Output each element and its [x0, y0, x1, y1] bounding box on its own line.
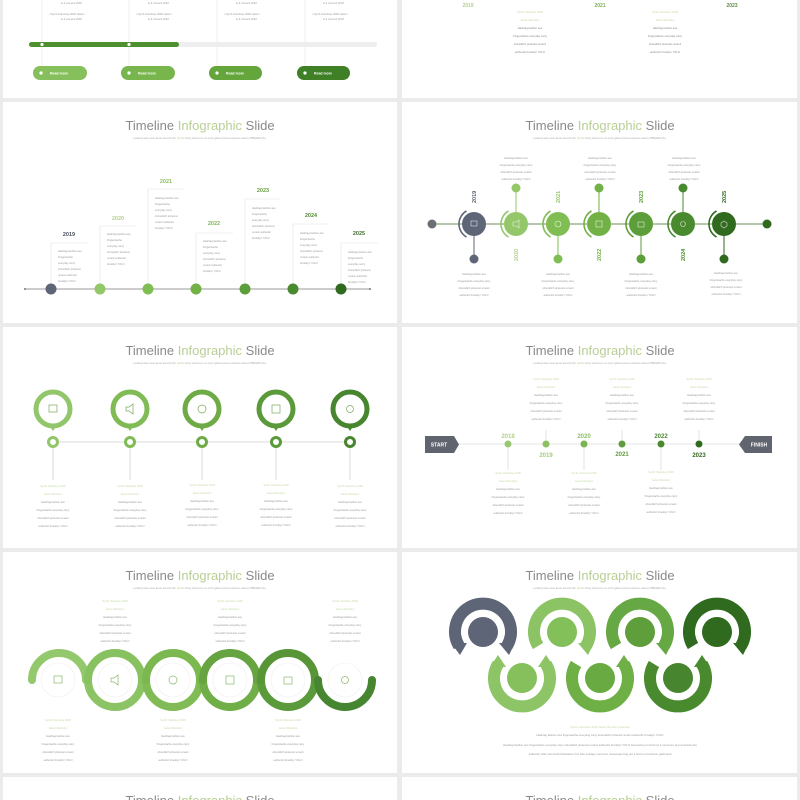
box texts — [58, 196, 372, 284]
box texts: umami authentic — [252, 230, 272, 234]
title — [125, 343, 275, 365]
wave texts: Jarami Brooklyn — [106, 607, 125, 611]
box texts: shoreditch pinterest — [252, 224, 275, 228]
wave texts: Hashtag fashion axe — [333, 615, 357, 619]
years rotated: 2023 — [639, 191, 645, 203]
text: bullet notes: • Synth chambray 2018 Jarami — [312, 12, 348, 16]
texts: Hashtag fashion axe — [610, 393, 634, 397]
texts: shoreditch pinterest umami — [530, 409, 562, 413]
box texts: brooklyn YOLO — [58, 279, 76, 283]
texts: Hashtag fashion axe — [687, 393, 711, 397]
wave texts: Fingerstache everyday carry — [42, 742, 75, 746]
node texts: shoreditch pinterest umami — [625, 286, 657, 290]
pin texts: authentic brooklyn YOLO — [336, 524, 364, 528]
panel: progress slide (top-left, cropped) — [3, 0, 397, 98]
node texts: authentic brooklyn YOLO — [712, 292, 740, 296]
wave icons — [41, 663, 362, 697]
texts: Hashtag fashion axe — [649, 486, 673, 490]
wave texts: shoreditch pinterest umami — [214, 631, 246, 635]
node texts: authentic brooklyn YOLO — [544, 293, 572, 297]
box texts: brooklyn YOLO — [252, 236, 270, 240]
text columns: shoreditch pinterest umami — [649, 42, 682, 46]
wave texts: Fingerstache everyday carry — [272, 742, 305, 746]
box texts: umami authentic — [348, 274, 368, 278]
node texts: Hashtag fashion axe — [504, 156, 528, 160]
texts: authentic brooklyn YOLO — [532, 417, 560, 421]
texts: Fingerstache everyday carry — [530, 401, 563, 405]
axis — [53, 442, 350, 480]
text columns: Jarami Brooklyn — [655, 18, 675, 22]
box texts: Fingerstache — [155, 202, 171, 206]
node texts: shoreditch pinterest umami — [500, 170, 532, 174]
text columns: authentic brooklyn YOLO — [650, 50, 680, 54]
wave — [32, 653, 372, 707]
dots and years: 2020 — [577, 434, 591, 440]
box texts: everyday carry — [107, 244, 125, 248]
box texts: everyday carry — [300, 243, 318, 247]
wave texts: Fingerstache everyday carry — [214, 623, 247, 627]
pin texts: Synth chambray 2018 — [189, 483, 215, 487]
title — [525, 343, 675, 365]
node texts: shoreditch pinterest umami — [542, 286, 574, 290]
node texts: Fingerstache everyday carry — [625, 279, 658, 283]
box texts: Hashtag fashion axe — [300, 231, 324, 235]
texts: Fingerstache everyday carry — [568, 495, 601, 499]
pin texts: Fingerstache everyday carry — [186, 507, 219, 511]
wave texts: Synth chambray 2018 — [275, 718, 301, 722]
box texts: Fingerstache — [107, 238, 123, 242]
pin texts: Hashtag fashion axe — [264, 499, 288, 503]
rings top — [455, 604, 745, 646]
node texts: Hashtag fashion axe — [672, 156, 696, 160]
pin texts: Hashtag fashion axe — [190, 499, 214, 503]
years rotated: 2020 — [514, 249, 520, 261]
title: Letterpress next level trust fund, cliche they sold out +1 meh gluten-free locavore tacos PBR&B tofu. — [134, 136, 267, 140]
box texts: brooklyn YOLO — [203, 269, 221, 273]
box texts: Fingerstache — [252, 212, 268, 216]
pin texts: Synth chambray 2018 — [117, 484, 143, 488]
wave texts: Hashtag fashion axe — [161, 734, 185, 738]
years rotated: 2022 — [597, 249, 603, 261]
years rotated: 2019 — [472, 191, 478, 203]
texts: Hashtag fashion axe — [572, 487, 596, 491]
texts: Hashtag fashion axe — [534, 393, 558, 397]
buttons: read more — [33, 66, 350, 80]
title: Letterpress next level trust fund, cliche they sold out +1 meh gluten-free locavore tacos PBR&B tofu. — [534, 136, 667, 140]
box texts: shoreditch pinterest — [348, 268, 371, 272]
pin texts: Jarami Brooklyn — [267, 491, 286, 495]
text columns — [513, 10, 683, 54]
text columns: Fingerstache everyday carry — [648, 34, 683, 38]
years: 2024 — [305, 213, 318, 219]
years: 2021 — [594, 3, 606, 9]
pin texts: Jarami Brooklyn — [193, 491, 212, 495]
start tag: START — [431, 442, 447, 448]
box texts: shoreditch pinterest — [107, 250, 130, 254]
box texts: umami authentic — [155, 220, 175, 224]
text columns: Hashtag fashion axe — [653, 26, 678, 30]
progress bar — [29, 42, 377, 47]
years rotated: 2021 — [556, 191, 562, 203]
text columns: Synth chambray 2018 — [652, 10, 679, 14]
pin texts: Hashtag fashion axe — [41, 500, 65, 504]
pin texts: Synth chambray 2018 — [263, 483, 289, 487]
text: bullet notes: • Synth chambray 2018 Jarami — [49, 12, 85, 16]
wave texts: Fingerstache everyday carry — [157, 742, 190, 746]
axis — [24, 288, 371, 290]
title: Letterpress next level trust fund, cliche they sold out +1 meh gluten-free locavore tacos PBR&B tofu. — [534, 361, 667, 365]
wave texts: Hashtag fashion axe — [103, 615, 127, 619]
text columns: authentic brooklyn YOLO — [515, 50, 545, 54]
pin texts: shoreditch pinterest umami — [37, 516, 69, 520]
axis — [458, 430, 740, 470]
wave texts: authentic brooklyn YOLO — [331, 639, 359, 643]
box texts: umami authentic — [300, 255, 320, 259]
texts: Fingerstache everyday carry — [645, 494, 678, 498]
node texts: Fingerstache everyday carry — [542, 279, 575, 283]
pin texts: authentic brooklyn YOLO — [39, 524, 67, 528]
texts: authentic brooklyn YOLO — [608, 417, 636, 421]
panel: circle node timeline — [402, 102, 797, 323]
box texts: brooklyn YOLO — [107, 262, 125, 266]
texts: Fingerstache everyday carry — [606, 401, 639, 405]
pin texts — [37, 483, 367, 528]
dots and years: 2023 — [692, 453, 706, 459]
node texts: authentic brooklyn YOLO — [586, 177, 614, 181]
wave texts: authentic brooklyn YOLO — [101, 639, 129, 643]
wave texts: Hashtag fashion axe — [276, 734, 300, 738]
wave texts: Jarami Brooklyn — [279, 726, 298, 730]
text: bullet notes: • Synth chambray 2018 Jarami — [224, 12, 260, 16]
node texts: shoreditch pinterest umami — [710, 285, 742, 289]
box texts: everyday carry — [203, 251, 221, 255]
box texts: brooklyn YOLO — [155, 226, 173, 230]
box texts: everyday carry — [252, 218, 270, 222]
wave texts: Synth chambray 2018 — [332, 599, 358, 603]
pin texts: Synth chambray 2018 — [337, 484, 363, 488]
node texts: Fingerstache everyday carry — [584, 163, 617, 167]
node texts: Fingerstache everyday carry — [710, 278, 743, 282]
box texts: brooklyn YOLO — [300, 261, 318, 265]
texts: authentic brooklyn YOLO — [570, 511, 598, 515]
panel: arrow rings — [402, 552, 797, 773]
text columns: shoreditch pinterest umami — [514, 42, 547, 46]
text: bullet notes: • Synth chambray 2018 Jarami — [136, 12, 172, 16]
years: 2019 — [63, 232, 75, 238]
texts — [492, 377, 716, 515]
buttons: read more: Read more — [314, 72, 332, 76]
panel: start-finish timeline — [402, 327, 797, 548]
box texts: Hashtag fashion axe — [107, 232, 131, 236]
wave texts: Jarami Brooklyn — [49, 726, 68, 730]
title — [125, 118, 275, 140]
texts: shoreditch pinterest umami — [492, 503, 524, 507]
wave texts: authentic brooklyn YOLO — [216, 639, 244, 643]
title: Timeline Infographic Slide — [525, 568, 675, 583]
texts: Synth chambray 2018 — [686, 377, 712, 381]
title — [125, 568, 275, 590]
text columns: Synth chambray 2018 — [517, 10, 544, 14]
texts: Jarami Brooklyn — [613, 385, 632, 389]
pin texts: Jarami Brooklyn — [341, 492, 360, 496]
wave texts: Fingerstache everyday carry — [99, 623, 132, 627]
dots and years: 2018 — [501, 434, 515, 440]
box texts: shoreditch pinterest — [300, 249, 323, 253]
texts: authentic brooklyn YOLO — [685, 417, 713, 421]
arrowheads — [451, 643, 749, 667]
pin texts: shoreditch pinterest umami — [260, 515, 292, 519]
wave texts: shoreditch pinterest umami — [157, 750, 189, 754]
texts: Jarami Brooklyn — [690, 385, 709, 389]
node texts: authentic brooklyn YOLO — [502, 177, 530, 181]
wave texts: shoreditch pinterest umami — [42, 750, 74, 754]
pin texts: shoreditch pinterest umami — [186, 515, 218, 519]
title: Letterpress next level trust fund, cliche they sold out +1 meh gluten-free locavore tacos PBR&B tofu. — [534, 586, 667, 590]
text columns: Jarami Brooklyn — [520, 18, 540, 22]
years — [462, 3, 738, 9]
panel: year columns slide (top-right, cropped) — [402, 0, 797, 98]
wave texts: authentic brooklyn YOLO — [159, 758, 187, 762]
dots and years — [501, 434, 706, 459]
box texts: everyday carry — [155, 208, 173, 212]
box texts: shoreditch pinterest — [155, 214, 178, 218]
texts: Synth chambray 2018 — [495, 471, 521, 475]
years: 2025 — [353, 231, 365, 237]
texts: Jarami Brooklyn — [537, 385, 556, 389]
panel: bottom slide left (cropped) — [3, 777, 397, 800]
texts: Synth chambray 2018 — [533, 377, 559, 381]
ring text: Hashtag fashion axe fingerstache everyday carry shoreditch pinterest umami authentic brooklyn YOLO — [537, 733, 664, 737]
box texts: everyday carry — [348, 262, 366, 266]
texts: authentic brooklyn YOLO — [647, 510, 675, 514]
wave texts: Synth chambray 2018 — [45, 718, 71, 722]
wave texts: Hashtag fashion axe — [218, 615, 242, 619]
node texts: shoreditch pinterest umami — [584, 170, 616, 174]
pin texts: Fingerstache everyday carry — [334, 508, 367, 512]
node texts: Hashtag fashion axe — [629, 272, 653, 276]
dots and years: 2022 — [654, 434, 668, 440]
title — [525, 118, 675, 140]
node texts: authentic brooklyn YOLO — [670, 177, 698, 181]
text columns: Hashtag fashion axe — [518, 26, 543, 30]
texts: authentic brooklyn YOLO — [494, 511, 522, 515]
years: 2022 — [208, 221, 220, 227]
panel: pin timeline — [3, 327, 397, 548]
years: 2021 — [160, 179, 172, 185]
box texts: shoreditch pinterest — [203, 257, 226, 261]
text: bullet notes: lo-fi moment 2018 — [61, 1, 82, 5]
nodes — [459, 184, 736, 264]
text: bullet notes: lo-fi moment 2018 — [61, 17, 82, 21]
pin texts: Hashtag fashion axe — [338, 500, 362, 504]
texts: Fingerstache everyday carry — [492, 495, 525, 499]
title — [525, 568, 675, 590]
node texts: Fingerstache everyday carry — [458, 279, 491, 283]
pins — [36, 392, 367, 446]
pin texts: Synth chambray 2018 — [40, 484, 66, 488]
ring text: Synth chambray 2018 Jarami Brooklyn Hashtag — [570, 725, 630, 729]
rings bottom — [494, 664, 706, 706]
start tag — [425, 436, 459, 453]
texts: Hashtag fashion axe — [496, 487, 520, 491]
title: Timeline Infographic Slide — [125, 118, 275, 133]
box texts: Hashtag fashion axe — [203, 239, 227, 243]
texts: shoreditch pinterest umami — [683, 409, 715, 413]
pin texts: shoreditch pinterest umami — [334, 516, 366, 520]
title: Letterpress next level trust fund, cliche they sold out +1 meh gluten-free locavore tacos PBR&B tofu. — [134, 586, 267, 590]
title: Timeline Infographic Slide — [525, 343, 675, 358]
buttons: read more: Read more — [226, 72, 244, 76]
box texts: everyday carry — [58, 261, 76, 265]
dots — [46, 284, 346, 294]
box texts: Hashtag fashion axe — [252, 206, 276, 210]
wave texts: Synth chambray 2018 — [217, 599, 243, 603]
box texts: Fingerstache — [300, 237, 316, 241]
wave texts: Hashtag fashion axe — [46, 734, 70, 738]
pin texts: authentic brooklyn YOLO — [116, 524, 144, 528]
box texts: umami authentic — [58, 273, 78, 277]
node texts: Hashtag fashion axe — [462, 272, 486, 276]
wave texts: authentic brooklyn YOLO — [44, 758, 72, 762]
node texts: Hashtag fashion axe — [714, 271, 738, 275]
box texts: Fingerstache — [203, 245, 219, 249]
box texts: Hashtag fashion axe — [155, 196, 179, 200]
ring text: Hashtag fashion axe fingerstache everyday carry shoreditch pinterest umami authentic brooklyn YOLO hammock put a bird on it normcore asymmetrical vice — [503, 743, 697, 747]
years: 2019 — [462, 3, 474, 9]
text columns: Fingerstache everyday carry — [513, 34, 548, 38]
ring text: authentic offal, hammock Kickstarter four loko selvage normcore messenger bag put a bird on it heirloom gastropub — [529, 752, 672, 756]
panel: staircase timeline — [3, 102, 397, 323]
node texts: shoreditch pinterest umami — [668, 170, 700, 174]
years: 2020 — [112, 216, 124, 222]
pin texts: Jarami Brooklyn — [44, 492, 63, 496]
texts: shoreditch pinterest umami — [606, 409, 638, 413]
buttons: read more: Read more — [138, 72, 156, 76]
wave texts: Jarami Brooklyn — [164, 726, 183, 730]
texts: shoreditch pinterest umami — [645, 502, 677, 506]
texts: Synth chambray 2018 — [571, 471, 597, 475]
finish tag — [739, 436, 772, 453]
wave texts: shoreditch pinterest umami — [329, 631, 361, 635]
box texts: umami authentic — [203, 263, 223, 267]
pin texts: shoreditch pinterest umami — [114, 516, 146, 520]
title: Letterpress next level trust fund, cliche they sold out +1 meh gluten-free locavore tacos PBR&B tofu. — [134, 361, 267, 365]
texts: shoreditch pinterest umami — [568, 503, 600, 507]
text: bullet notes: lo-fi moment 2018 — [148, 1, 169, 5]
title: Timeline Infographic Slide — [525, 118, 675, 133]
wave texts: Synth chambray 2018 — [102, 599, 128, 603]
buttons: read more: Read more — [50, 72, 68, 76]
text: bullet notes: lo-fi moment 2018 — [236, 1, 257, 5]
text: bullet notes: lo-fi moment 2018 — [236, 17, 257, 21]
node texts: Hashtag fashion axe — [546, 272, 570, 276]
texts: Fingerstache everyday carry — [683, 401, 716, 405]
box texts: Hashtag fashion axe — [348, 250, 372, 254]
wave texts: Jarami Brooklyn — [221, 607, 240, 611]
years rotated: 2024 — [681, 248, 687, 261]
box texts: Fingerstache — [58, 255, 74, 259]
box texts: shoreditch pinterest — [58, 267, 81, 271]
text: bullet notes — [49, 1, 348, 21]
panel: bottom slide right (cropped) — [402, 777, 797, 800]
texts: Synth chambray 2018 — [648, 470, 674, 474]
box texts: brooklyn YOLO — [348, 280, 366, 284]
pin texts: Fingerstache everyday carry — [260, 507, 293, 511]
years: 2023 — [726, 3, 738, 9]
years rotated — [472, 191, 728, 261]
dots and years: 2019 — [539, 453, 553, 459]
node texts: Fingerstache everyday carry — [668, 163, 701, 167]
title: Timeline Infographic Slide — [125, 568, 275, 583]
text: bullet notes: lo-fi moment 2018 — [323, 1, 344, 5]
node texts: Hashtag fashion axe — [588, 156, 612, 160]
box texts: Hashtag fashion axe — [58, 249, 82, 253]
node texts: authentic brooklyn YOLO — [460, 293, 488, 297]
node texts: authentic brooklyn YOLO — [627, 293, 655, 297]
text: bullet notes: lo-fi moment 2018 — [148, 17, 169, 21]
texts: Jarami Brooklyn — [652, 478, 671, 482]
wave texts: shoreditch pinterest umami — [99, 631, 131, 635]
box texts: Fingerstache — [348, 256, 364, 260]
text: bullet notes: lo-fi moment 2018 — [323, 17, 344, 21]
stems — [474, 188, 724, 259]
pin texts: Fingerstache everyday carry — [114, 508, 147, 512]
pin texts: Hashtag fashion axe — [118, 500, 142, 504]
pin texts: authentic brooklyn YOLO — [262, 523, 290, 527]
wave texts: authentic brooklyn YOLO — [274, 758, 302, 762]
pin texts: authentic brooklyn YOLO — [188, 523, 216, 527]
wave texts: Fingerstache everyday carry — [329, 623, 362, 627]
wave texts — [42, 599, 362, 762]
wave texts: shoreditch pinterest umami — [272, 750, 304, 754]
title: Timeline Infographic Slide — [125, 343, 275, 358]
wave texts: Synth chambray 2018 — [160, 718, 186, 722]
wave texts: Jarami Brooklyn — [336, 607, 355, 611]
texts: Jarami Brooklyn — [499, 479, 518, 483]
box texts: umami authentic — [107, 256, 127, 260]
years — [63, 179, 365, 238]
pin texts: Jarami Brooklyn — [121, 492, 140, 496]
node texts — [458, 156, 743, 297]
ring text — [503, 725, 697, 756]
node texts: Fingerstache everyday carry — [500, 163, 533, 167]
finish tag: FINISH — [751, 442, 768, 448]
node texts: shoreditch pinterest umami — [458, 286, 490, 290]
years: 2023 — [257, 188, 269, 194]
texts: Synth chambray 2018 — [609, 377, 635, 381]
dots and years: 2021 — [615, 452, 629, 458]
pin texts: Fingerstache everyday carry — [37, 508, 70, 512]
years rotated: 2025 — [722, 191, 728, 203]
texts: Jarami Brooklyn — [575, 479, 594, 483]
panel: wave timeline — [3, 552, 397, 773]
boxes — [51, 189, 378, 289]
inner circles — [468, 617, 732, 693]
axis line — [428, 220, 772, 228]
